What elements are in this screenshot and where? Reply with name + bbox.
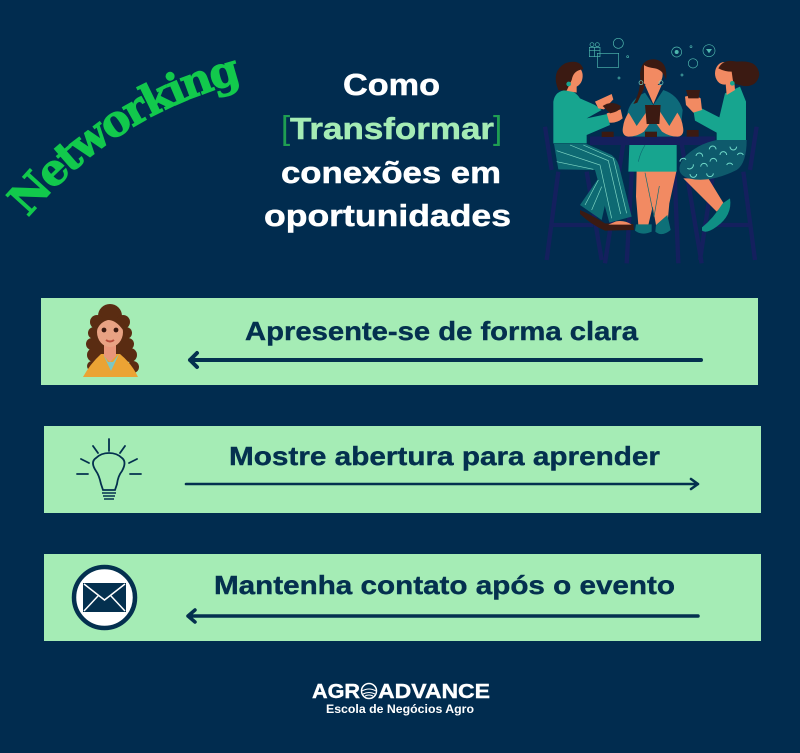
icon: woman portrait [83, 304, 139, 377]
illustration: three women at a table [545, 38, 759, 263]
icon: envelope [74, 567, 135, 628]
curved heading: Networking: Networking [5, 60, 239, 217]
label: Mostre abertura para aprender [229, 441, 660, 471]
woman right [679, 61, 759, 232]
arrow: left [190, 353, 701, 367]
cakes on table [602, 130, 699, 137]
logo: Agroadvance [312, 680, 490, 716]
stools and table [545, 127, 757, 263]
title: Como [343, 67, 440, 102]
arrow: left [188, 610, 698, 622]
panel: abertura [44, 426, 761, 513]
title highlight: Transformar: [ [281, 109, 290, 146]
icon: light bulb [77, 439, 141, 499]
title: conexões em [281, 155, 501, 190]
panel: contato [44, 554, 761, 641]
title: oportunidades [264, 198, 511, 233]
logo: Agroadvance: AGR [312, 680, 360, 703]
title highlight: Transformar: ] [493, 109, 502, 146]
logo: Agroadvance: ADVANCE [378, 680, 490, 703]
label: Mantenha contato após o evento [214, 570, 675, 600]
woman left [553, 62, 634, 231]
label: Apresente-se de forma clara [245, 316, 639, 346]
title [264, 67, 511, 233]
icon: logo globe [362, 684, 376, 698]
woman center [623, 59, 683, 234]
title highlight: Transformar: Transformar [290, 111, 494, 146]
arrow: right [186, 479, 698, 489]
logo: Agroadvance: Escola de Negócios Agro [326, 704, 474, 716]
panel: apresente-se [41, 298, 758, 385]
floating icons [589, 38, 715, 79]
